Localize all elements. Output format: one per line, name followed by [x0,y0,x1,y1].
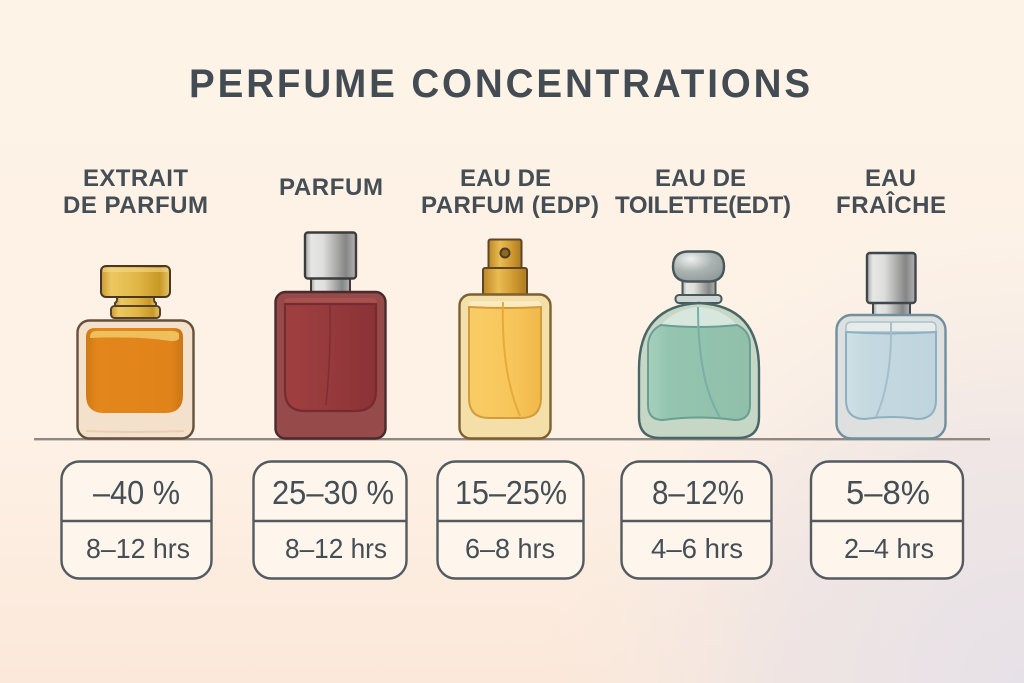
data card: eau fraiche [811,462,963,578]
heading: eau de toilette: EAU DE [655,165,746,192]
liquid highlight [90,331,179,341]
heading: eau de parfum: EAU DE [460,165,551,192]
liquid [648,325,750,420]
concentration: 25–30 % [272,474,394,511]
heading: eau de parfum [421,165,599,219]
heading: eau fraiche: EAU [865,165,916,192]
bottle: eau de toilette [639,252,759,438]
data card: extrait de parfum [62,462,212,578]
heading: parfum: PARFUM [279,174,383,201]
heading: eau fraiche: FRAÎCHE [836,191,946,219]
nozzle [500,248,510,258]
dip tube [503,302,520,416]
glass [276,292,386,438]
data card: eau de toilette [622,462,772,578]
heading: eau de parfum: PARFUM (EDP) [421,192,599,219]
data card: parfum [254,462,406,578]
upper band [469,301,541,308]
base reflection [86,431,184,432]
bottle: eau fraiche [836,253,946,438]
longevity: 8–12 hrs [86,533,190,564]
collar [676,295,722,303]
cap [867,253,916,303]
neck [682,281,716,296]
data card: eau de parfum [438,462,584,578]
shelf line [34,438,990,440]
concentration: 8–12% [652,474,744,511]
liquid [285,304,376,411]
sprayer [488,240,522,268]
dip tube [876,322,891,417]
glass [639,303,759,438]
glass [460,294,550,438]
longevity: 2–4 hrs [844,533,934,564]
glass [78,320,194,438]
bottle: eau de parfum [460,240,550,438]
heading: extrait de parfum: DE PARFUM [63,192,208,219]
glass [836,315,946,438]
concentration: 5–8% [846,474,930,511]
heading: extrait de parfum [63,165,208,219]
cap [673,252,724,282]
upper liquid band [846,322,936,332]
longevity: 6–8 hrs [465,533,555,564]
dip tube [698,307,720,417]
upper band [284,298,377,305]
bottle: extrait de parfum [78,266,194,438]
longevity: 4–6 hrs [651,533,743,564]
title: PERFUME CONCENTRATIONS [189,62,813,106]
concentration: 15–25% [455,474,567,511]
heading: eau fraiche [836,165,946,219]
cap [305,232,356,278]
heading: eau de toilette [615,165,791,219]
neck [311,277,350,292]
liquid [86,328,183,413]
bottle: parfum [276,232,386,438]
heading: eau de toilette: TOILETTE(EDT) [615,192,791,219]
dip tube [326,305,330,405]
collar [111,297,160,318]
neck [873,302,910,315]
longevity: 8–12 hrs [285,533,387,564]
heading: extrait de parfum: EXTRAIT [83,165,188,192]
upper glass [661,307,737,327]
liquid [846,332,936,419]
liquid [469,307,541,418]
concentration: –40 % [93,474,180,511]
collar [483,268,527,295]
cap [101,266,170,297]
